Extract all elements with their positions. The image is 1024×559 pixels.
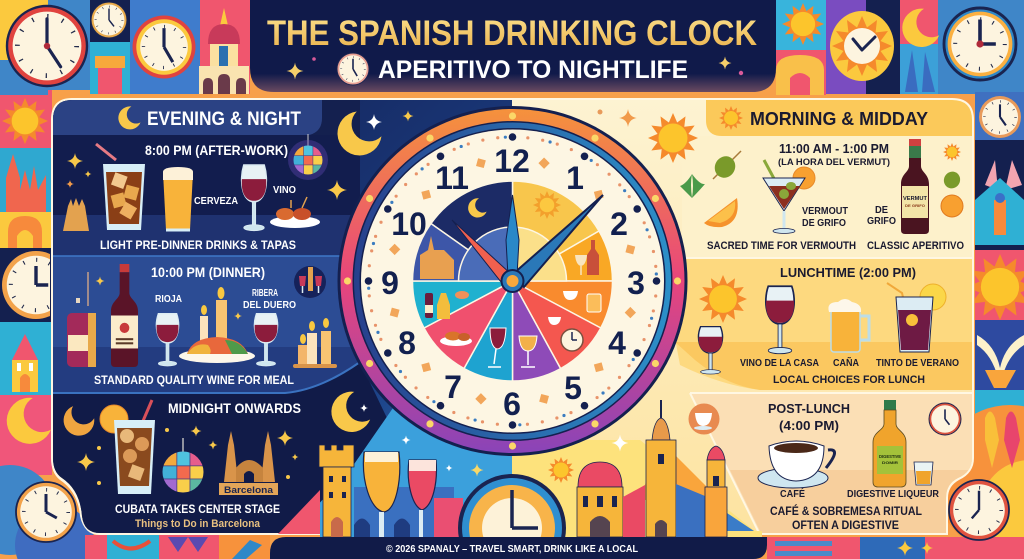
icon: clock bottom left bbox=[16, 482, 76, 542]
footer bar bbox=[270, 537, 767, 559]
icon: title clock bbox=[337, 53, 369, 85]
icon: clock large bbox=[7, 6, 87, 86]
icon: sun small bbox=[548, 457, 574, 483]
label: de grifo: GRIFO bbox=[867, 216, 896, 227]
row: vermut hour bbox=[680, 139, 964, 252]
panel: morning and midday bbox=[680, 106, 964, 532]
label: de grifo bbox=[867, 205, 896, 227]
captions: CLASSIC APERITIVO bbox=[867, 240, 964, 252]
icon: tinto de verano bbox=[887, 283, 946, 352]
label: cerveza: CERVEZA bbox=[194, 196, 238, 207]
icon: orange half bbox=[704, 198, 738, 227]
heading: 8 PM: 8:00 PM (AFTER-WORK) bbox=[145, 142, 288, 158]
icon: liqueur bottle: DIGESTIVE bbox=[879, 454, 901, 459]
icon: pasta plate bbox=[179, 337, 255, 363]
clock numerals: 4 bbox=[608, 325, 626, 361]
footer text: © 2026 SPANALY – TRAVEL SMART, DRINK LIKE A LOCAL bbox=[386, 544, 638, 555]
icon: candles bbox=[200, 287, 227, 343]
clock numerals: 9 bbox=[381, 265, 399, 301]
icon: arch tile bbox=[8, 216, 42, 248]
icon: bottle ribera bbox=[111, 264, 138, 367]
icon: blue block bbox=[676, 484, 705, 537]
caption: LOCAL CHOICES FOR LUNCH bbox=[773, 374, 925, 386]
clock numerals: 12 bbox=[494, 143, 530, 179]
icon: tapas plate bbox=[270, 197, 320, 228]
top-right decorations bbox=[776, 3, 1016, 95]
icon: bottles tile bbox=[985, 412, 1020, 468]
icon: blue arcade bbox=[354, 487, 454, 537]
caption: CAFÉ & SOBREMESA RITUAL bbox=[770, 503, 922, 518]
clock numerals: 10 bbox=[391, 206, 427, 242]
labels bbox=[740, 356, 959, 369]
icon: large wine glass bbox=[766, 286, 794, 354]
heading: 10 PM: 10:00 PM (DINNER) bbox=[151, 264, 265, 280]
icon: vermut bottle: VERMUT bbox=[903, 196, 927, 202]
icon: beer mug bbox=[828, 299, 869, 352]
icon: wine glass ribera bbox=[254, 314, 278, 366]
captions bbox=[707, 240, 964, 252]
icon: vermut bottle: DE GRIFO bbox=[905, 203, 925, 208]
icon: pie coffee and beer bbox=[563, 291, 601, 312]
decoration: sun right of clock bbox=[598, 109, 698, 163]
icon: building bbox=[199, 8, 249, 94]
sub caption: Things to Do in Barcelona bbox=[135, 518, 261, 530]
labels: DIGESTIVE LIQUEUR bbox=[847, 489, 940, 500]
heading: post-lunch bbox=[768, 401, 850, 433]
icon: wine glass rioja bbox=[156, 314, 179, 366]
heading: midnight: MIDNIGHT ONWARDS bbox=[168, 401, 301, 416]
city skyline bottom right bbox=[548, 400, 727, 537]
row: lunchtime bbox=[699, 265, 959, 386]
label: ribera del duero bbox=[243, 288, 296, 311]
caption: OFTEN A DIGESTIVE bbox=[792, 518, 899, 532]
panel: evening and night bbox=[58, 106, 347, 530]
top-left decorations bbox=[7, 2, 249, 94]
icon: pie church bbox=[420, 236, 454, 279]
title: THE SPANISH DRINKING CLOCK bbox=[267, 14, 757, 53]
inner pie chart bbox=[412, 181, 612, 381]
label: ribera del duero: RIBERA bbox=[252, 288, 278, 299]
icon: olive bbox=[711, 151, 741, 182]
sparkles bbox=[286, 56, 743, 80]
icon: sun clock bbox=[830, 11, 894, 81]
heading: post-lunch: POST-LUNCH bbox=[768, 401, 850, 416]
icon: pie bottle and glass bbox=[575, 240, 599, 275]
icon: pie cocktail bbox=[519, 336, 537, 367]
label: barcelona sign: Barcelona bbox=[224, 485, 274, 495]
icon: carton bbox=[67, 272, 96, 367]
icon: champagne glass bbox=[363, 452, 400, 537]
icon: liqueur bottle bbox=[873, 400, 906, 487]
bottom clock bbox=[458, 474, 566, 559]
icon: toast tile bbox=[985, 160, 1022, 190]
heading: vermut hour: 11:00 AM - 1:00 PM bbox=[779, 141, 889, 156]
icon: clock bottom right bbox=[949, 480, 1009, 540]
clock face bbox=[361, 130, 664, 432]
main panel bbox=[50, 98, 982, 538]
icon: moon bbox=[902, 9, 939, 47]
clock numerals: 8 bbox=[398, 325, 416, 361]
icon: red clock bbox=[132, 16, 196, 78]
icon: disco ball bbox=[162, 438, 204, 493]
row: post-lunch bbox=[688, 400, 961, 532]
icon: disco ball bbox=[288, 134, 328, 180]
icon: pie tapas bbox=[440, 332, 472, 346]
subtitle: APERITIVO TO NIGHTLIFE bbox=[378, 56, 688, 84]
labels: CAFÉ bbox=[780, 487, 805, 500]
icon: castle tile bbox=[6, 154, 46, 212]
icon: candle tray bbox=[293, 318, 337, 368]
icon: small clock bbox=[91, 2, 127, 38]
long hand bbox=[513, 195, 603, 287]
sparkles bbox=[96, 276, 242, 320]
city skyline bottom left bbox=[319, 436, 484, 537]
heading: morning and midday: MORNING & MIDDAY bbox=[750, 109, 928, 129]
diamonds bbox=[389, 158, 636, 404]
clock bbox=[338, 106, 688, 456]
hub bbox=[500, 269, 524, 293]
icon: sun tile right bbox=[975, 254, 1024, 320]
icon: wine glass bbox=[242, 165, 266, 231]
clock numerals: 7 bbox=[444, 369, 462, 405]
labels: VINO DE LA CASA bbox=[740, 358, 819, 369]
icon: pie bottles bbox=[425, 291, 469, 319]
icon: cubata bbox=[114, 400, 155, 494]
icon: small wine glass bbox=[699, 327, 722, 374]
label: ribera del duero: DEL DUERO bbox=[243, 300, 296, 311]
label: de grifo: DE bbox=[875, 205, 888, 216]
clock rim bbox=[338, 106, 688, 456]
caption: CUBATA TAKES CENTER STAGE bbox=[115, 502, 280, 516]
icon: stopwatch tile bbox=[979, 96, 1021, 138]
caption bbox=[770, 503, 922, 532]
labels: TINTO DE VERANO bbox=[876, 358, 959, 369]
sparkles bbox=[66, 153, 347, 200]
icon: glasses badge bbox=[294, 266, 326, 298]
right side tile art bbox=[949, 96, 1024, 540]
clock numerals: 6 bbox=[503, 386, 521, 422]
clock numerals bbox=[381, 143, 645, 422]
minute dots bbox=[368, 137, 656, 425]
icon: small tower bbox=[705, 446, 727, 537]
clock numerals: 11 bbox=[435, 160, 469, 196]
row: 8 PM bbox=[63, 134, 347, 252]
icon: pie moon bbox=[468, 198, 487, 218]
label: vermout de grifo bbox=[802, 206, 848, 229]
heading: post-lunch: (4:00 PM) bbox=[779, 418, 839, 433]
icon: barcelona cathedral bbox=[219, 431, 278, 495]
label: vermout de grifo: DE GRIFO bbox=[802, 218, 846, 229]
icon: pink block bbox=[434, 498, 463, 537]
icon: clock right bbox=[944, 8, 1016, 80]
icon: star bbox=[612, 434, 628, 452]
row: 10 PM bbox=[67, 264, 337, 387]
icon: shot glass bbox=[914, 462, 933, 485]
icon: rose glass bbox=[408, 460, 436, 537]
icon: fountain tile bbox=[977, 335, 1024, 388]
icon: coffee cup bbox=[758, 441, 835, 488]
decoration: moon and sparkles left of clock bbox=[331, 107, 414, 432]
icon: martini bbox=[763, 160, 815, 234]
icon: moon tile bbox=[7, 398, 51, 444]
icon: iced drink bbox=[96, 144, 145, 230]
icon: domed building bbox=[577, 462, 623, 537]
labels: CAÑA bbox=[833, 356, 859, 369]
icon: toast glasses bbox=[905, 50, 935, 92]
label: rioja: RIOJA bbox=[155, 294, 182, 305]
icon: gift bbox=[95, 56, 125, 94]
caption: STANDARD QUALITY WINE FOR MEAL bbox=[94, 373, 294, 387]
heading: lunchtime: LUNCHTIME (2:00 PM) bbox=[780, 265, 916, 280]
icon: liqueur bottle: DOMIR bbox=[882, 460, 898, 465]
icon: clock tile bbox=[2, 251, 50, 319]
labels bbox=[780, 487, 940, 500]
sparkles bbox=[402, 436, 484, 476]
sparkles bbox=[77, 426, 298, 485]
icon: sun bbox=[782, 3, 824, 45]
icon: moon bbox=[58, 400, 99, 441]
icon: orange slice bbox=[100, 405, 128, 433]
icon: sagrada bbox=[63, 198, 89, 231]
icon: beer bbox=[163, 167, 193, 230]
icon: yellow tower bbox=[319, 445, 354, 537]
clock numerals: 5 bbox=[564, 370, 582, 406]
icon: wall clock bbox=[929, 403, 961, 435]
icon: arch bbox=[776, 55, 824, 95]
caption: LIGHT PRE-DINNER DRINKS & TAPAS bbox=[100, 238, 296, 252]
vertical hand bbox=[506, 195, 519, 276]
red hand bbox=[452, 220, 512, 287]
rim beads bbox=[344, 112, 681, 450]
icon: pie wine bbox=[488, 328, 506, 367]
icons: garnish column bbox=[941, 143, 963, 217]
clock numerals: 3 bbox=[627, 265, 645, 301]
sub heading: (LA HORA DEL VERMUT) bbox=[778, 157, 890, 168]
icon: pink block bbox=[623, 485, 645, 537]
label: vino: VINO bbox=[273, 185, 296, 196]
row: midnight bbox=[58, 400, 301, 530]
icon: pie cup and clock bbox=[548, 317, 583, 351]
title band bbox=[250, 0, 776, 92]
left side tile art bbox=[2, 98, 76, 542]
icon: sun tile bbox=[2, 98, 48, 144]
icon: pie sun bbox=[533, 191, 561, 219]
icon: coffee badge bbox=[688, 404, 720, 434]
pie icons bbox=[420, 191, 601, 367]
label: vermout de grifo: VERMOUT bbox=[802, 206, 848, 217]
heading: evening and night: EVENING & NIGHT bbox=[147, 109, 301, 130]
icon: house tile bbox=[12, 334, 38, 392]
clock numerals: 1 bbox=[566, 160, 584, 196]
hour dots bbox=[365, 133, 660, 429]
icon: leaf bbox=[680, 174, 705, 198]
clock numerals: 2 bbox=[610, 206, 628, 242]
icon: vermut bottle bbox=[901, 139, 929, 234]
icon: mosaic tile bbox=[975, 178, 1024, 245]
icon: tall tower bbox=[646, 400, 676, 537]
clock hands bbox=[452, 195, 603, 293]
captions: SACRED TIME FOR VERMOUTH bbox=[707, 240, 856, 252]
icon: sun bbox=[699, 275, 747, 323]
